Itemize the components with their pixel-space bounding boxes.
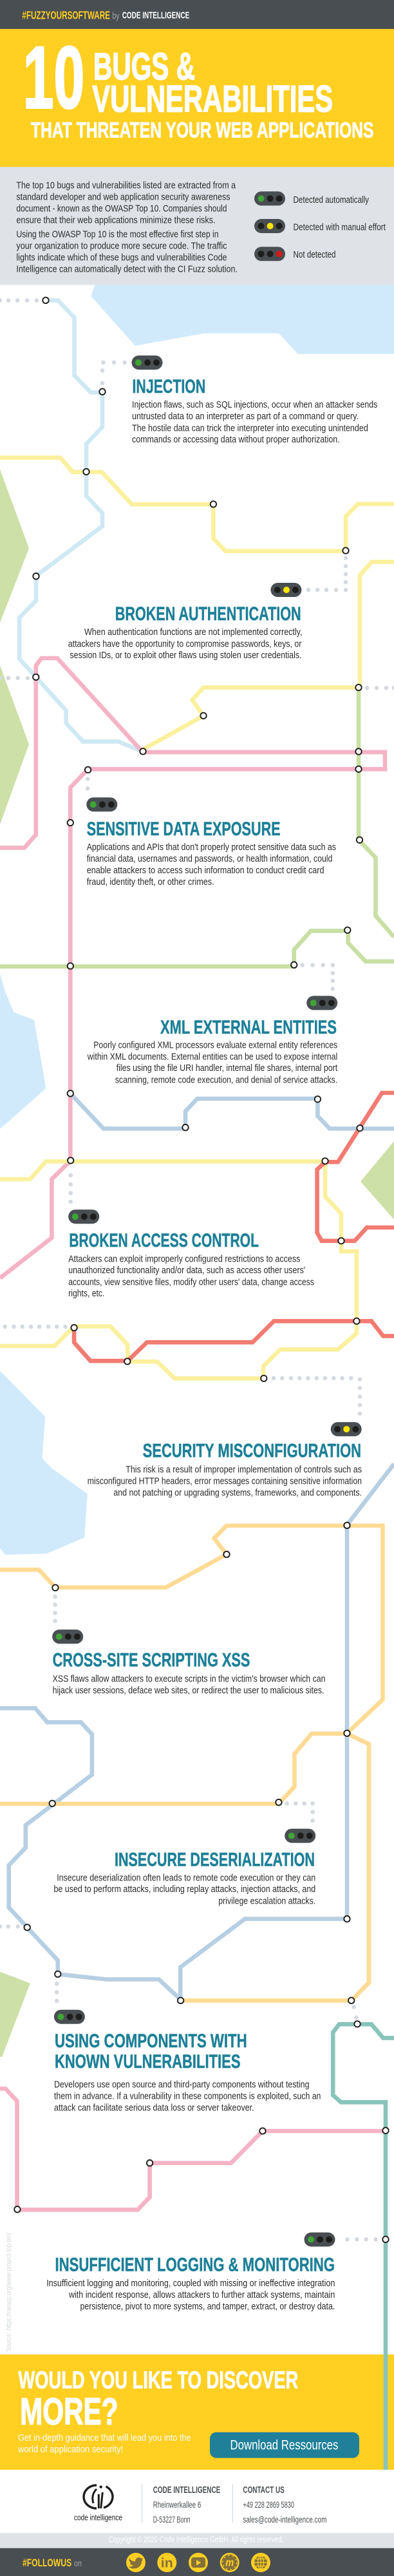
panel: insufficient logging and monitoring: Insufficient logging and monitoring, coupled with missing or ineffective integration <box>46 2278 335 2289</box>
panel: broken authentication: When authentication functions are not implemented correctly, <box>84 627 303 638</box>
panel: broken access control: BROKEN ACCESS CONTROL <box>69 1230 259 1251</box>
follow us bar <box>0 2548 394 2576</box>
panel: broken authentication <box>68 583 303 661</box>
panel: introduction and legend <box>0 167 394 285</box>
company address <box>153 2485 221 2524</box>
panel: insufficient logging and monitoring: with incident response, allows attackers to further attack systems, maintain <box>68 2289 335 2300</box>
panel: insecure deserialization: privilege escalation attacks. <box>218 1895 315 1906</box>
panel: cross-site scripting: hijack user sessions, deface web sites, or redirect the user to malicious sites. <box>53 1685 324 1696</box>
panel: using components with known vulnerabilities: them in advance. If a vulnerability in these components is exploited, such an <box>54 2091 321 2102</box>
legend: detected automatically <box>254 191 369 205</box>
panel: insecure deserialization: INSECURE DESERIALIZATION <box>115 1850 315 1870</box>
panel: broken access control: Attackers can exploit improperly configured restrictions to access <box>68 1253 300 1264</box>
logo: code intelligence: code intelligence <box>74 2513 122 2522</box>
call to action banner: MORE? <box>20 2391 118 2432</box>
metro line: pink lower <box>0 2088 386 2210</box>
intro text: standard developer and web application security awareness <box>16 192 230 203</box>
panel: using components with known vulnerabilities <box>54 2010 321 2114</box>
follow us bar: on <box>74 2558 82 2568</box>
panel: xml external entities: files using the file URI handler, internal file shares, internal port <box>117 1063 338 1074</box>
panel: injection: commands or accessing data without proper authorization. <box>132 434 340 445</box>
panel: insecure deserialization <box>54 1829 315 1906</box>
panel: injection <box>131 355 377 445</box>
panel: cross-site scripting <box>52 1629 325 1696</box>
call to action banner: Get in-depth guidance that will lead you into the <box>18 2432 191 2443</box>
call to action banner <box>0 2354 394 2470</box>
panel: xml external entities: Poorly configured XML processors evaluate external entity references <box>93 1039 337 1051</box>
metro line: steel blue right <box>0 1464 394 2000</box>
title banner <box>0 28 394 167</box>
contact details: +49 228 2869 5830 <box>243 2499 294 2510</box>
metro line: red <box>317 1093 394 1241</box>
panel: sensitive data exposure: SENSITIVE DATA EXPOSURE <box>87 819 281 840</box>
panel: broken authentication: attackers have the opportunity to compromise passwords, keys, or <box>68 638 301 649</box>
icon: linkedin: in <box>161 2557 173 2571</box>
metro line: red lower <box>74 1321 394 1361</box>
legend: not detected: Not detected <box>294 249 336 260</box>
metro line: steel blue upper <box>70 1094 394 1128</box>
map background shapes <box>0 285 394 2057</box>
station nodes <box>14 298 389 2242</box>
panel: sensitive data exposure: Applications and APIs that don't properly protect sensitive data such as <box>87 842 336 853</box>
title banner: 10 <box>23 28 84 128</box>
panel: insufficient logging and monitoring <box>46 2232 335 2312</box>
icon: meetup: m <box>225 2557 234 2569</box>
panel: broken access control <box>68 1209 314 1299</box>
panel: sensitive data exposure: fraud, identity theft, or other crimes. <box>87 876 214 887</box>
panel: broken access control: accounts, view sensitive files, modify other users' data, change access <box>68 1276 314 1287</box>
contact details <box>243 2485 326 2524</box>
legend: detected automatically: Detected automatically <box>294 194 369 205</box>
panel: security misconfiguration <box>88 1422 362 1498</box>
follow us bar: #FOLLOWUS <box>23 2557 71 2569</box>
legend: detected with manual effort <box>254 219 386 233</box>
panel: insufficient logging and monitoring: persistence, pivot to more systems, and tamper, extract, or destroy data. <box>80 2301 335 2312</box>
contact details: CONTACT US <box>243 2485 285 2496</box>
download button: Download Ressources <box>230 2438 338 2452</box>
top hashtag bar: CODE INTELLIGENCE <box>122 10 189 21</box>
metro line: orange lower <box>0 1734 369 2000</box>
top hashtag bar <box>0 0 394 29</box>
icon: linkedin <box>157 2553 176 2572</box>
panel: using components with known vulnerabilities: KNOWN VULNERABILITIES <box>55 2051 241 2072</box>
intro text: Intelligence can automatically detect with the CI Fuzz solution. <box>16 264 238 275</box>
company address: CODE INTELLIGENCE <box>153 2485 221 2496</box>
company address: D-53227 Bonn <box>153 2514 191 2524</box>
panel: sensitive data exposure: financial data, usernames and passwords, or health information, could <box>87 853 332 864</box>
panel: sensitive data exposure: enable attackers to access such information to conduct credit card <box>87 865 324 876</box>
metro line: light blue <box>19 300 143 752</box>
metro line: yellow second <box>143 562 394 750</box>
download button <box>210 2432 359 2458</box>
intro text: your organization to produce more secure code. The traffic <box>16 241 227 252</box>
call to action banner: world of application security! <box>17 2444 123 2455</box>
intro text: Using the OWASP Top 10 is the most effective first step in <box>16 229 219 240</box>
panel: cross-site scripting: XSS flaws allow attackers to execute scripts in the victim's browser which can <box>53 1673 325 1684</box>
icon: youtube <box>189 2553 208 2572</box>
panel: insecure deserialization: be used to perform attacks, including replay attacks, injection attacks, and <box>54 1884 315 1895</box>
panel: using components with known vulnerabilities: USING COMPONENTS WITH <box>55 2031 247 2052</box>
metro line: pink upper <box>0 658 385 1278</box>
panel: broken access control: rights, etc. <box>68 1288 104 1299</box>
connector dots <box>0 298 394 2242</box>
metro line: orange upper <box>0 1526 382 1733</box>
source note: Source: https://owasp.org/www-project-top-ten/ <box>5 2232 13 2352</box>
top hashtag bar: by <box>112 10 120 21</box>
copyright bar <box>0 2533 394 2548</box>
footer dividers <box>142 2485 233 2523</box>
copyright bar: Copyright © 2020 Code Intelligence GmbH. All rights reserved. <box>109 2535 283 2544</box>
panel: broken authentication: BROKEN AUTHENTICATION <box>115 603 301 625</box>
panel: cross-site scripting: CROSS-SITE SCRIPTING XSS <box>53 1650 250 1671</box>
intro text: document - known as the OWASP Top 10. Companies should <box>16 204 227 214</box>
panel: injection: INJECTION <box>133 376 205 397</box>
panel: injection: untrusted data to an interpreter as part of a command or query. <box>132 411 359 422</box>
title banner: BUGS & <box>93 45 195 88</box>
icon: meetup <box>220 2553 239 2572</box>
panel: sensitive data exposure <box>86 797 336 887</box>
panel: broken authentication: session IDs, or to exploit other flaws using stolen user credentials. <box>70 650 301 661</box>
intro text: The top 10 bugs and vulnerabilities listed are extracted from a <box>16 180 236 191</box>
icon: twitter <box>126 2553 145 2572</box>
intro text <box>16 180 238 275</box>
panel: insecure deserialization: Insecure deserialization often leads to remote code execution or they can <box>57 1872 315 1883</box>
panel: using components with known vulnerabilities: attack can facilitate serious data loss or server takeover. <box>54 2103 254 2114</box>
panel: xml external entities: within XML documents. External entities can be used to expose internal <box>87 1051 337 1062</box>
panel: xml external entities <box>87 996 338 1085</box>
metro line: teal <box>333 2024 394 2470</box>
company address: Rheinwerkallee 6 <box>153 2499 201 2510</box>
intro text: lights indicate which of these bugs and vulnerabilities Code <box>16 252 227 263</box>
top hashtag bar: #FUZZYOURSOFTWARE <box>22 8 110 21</box>
metro line: green lower <box>0 931 394 967</box>
panel: xml external entities: scanning, remote code execution, and denial of service attacks. <box>115 1074 337 1085</box>
metro line: yellow upper <box>0 458 394 551</box>
legend: not detected <box>254 247 336 261</box>
contact details: sales@code-intelligence.com <box>243 2514 326 2524</box>
icon: website globe <box>251 2553 270 2572</box>
panel: broken access control: unauthorized functionality and/or data, such as access other users' <box>68 1265 305 1276</box>
metro line: yellow long <box>0 1162 357 1378</box>
metro line: green <box>359 688 394 937</box>
panel: using components with known vulnerabilities: Developers use open source and third-party components without testing <box>54 2079 309 2090</box>
logo: code intelligence <box>74 2485 122 2522</box>
intro text: ensure that their web applications minimize these risks. <box>16 215 216 226</box>
